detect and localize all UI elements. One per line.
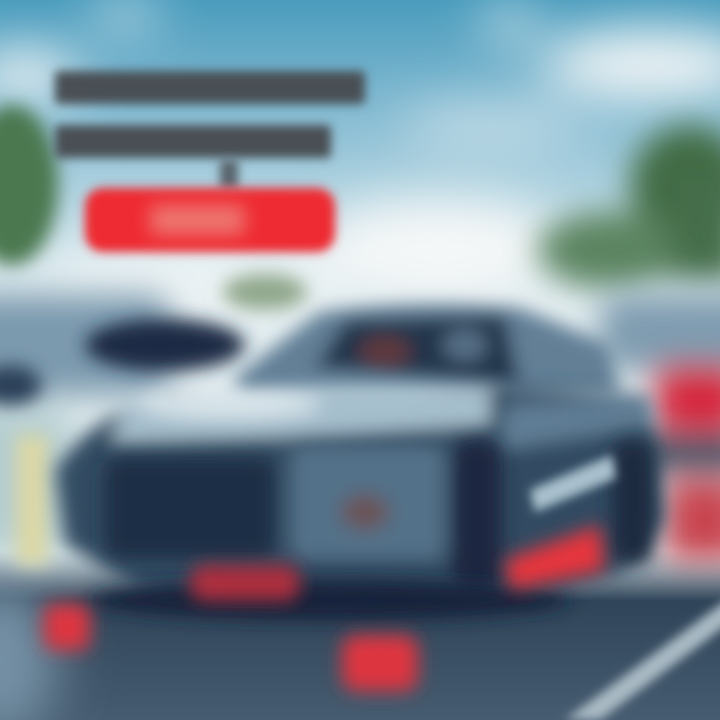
- car roof and windows: [235, 304, 620, 395]
- red accents: [44, 525, 605, 691]
- trees: left: [0, 105, 58, 265]
- trees: right: [538, 125, 720, 288]
- small trees behind sign: [223, 274, 307, 310]
- road stripe: [565, 590, 720, 720]
- cars at right: [600, 295, 720, 560]
- sign red panel: [85, 188, 335, 252]
- dark car at left: [0, 319, 245, 405]
- car: [55, 304, 665, 620]
- road: [0, 550, 720, 720]
- roadside and cars at left: [0, 295, 170, 550]
- car grille: [105, 440, 654, 590]
- car body: [55, 385, 665, 605]
- sign red panel markings: [150, 205, 245, 235]
- sign heading lines: [55, 71, 365, 158]
- lighter road at left: [0, 580, 60, 720]
- yellow kerb: [16, 435, 48, 565]
- sign post: [220, 160, 238, 188]
- car shadow: [90, 580, 570, 620]
- clouds: [0, 2, 720, 300]
- sign: [55, 71, 365, 252]
- car side highlight: [530, 455, 616, 512]
